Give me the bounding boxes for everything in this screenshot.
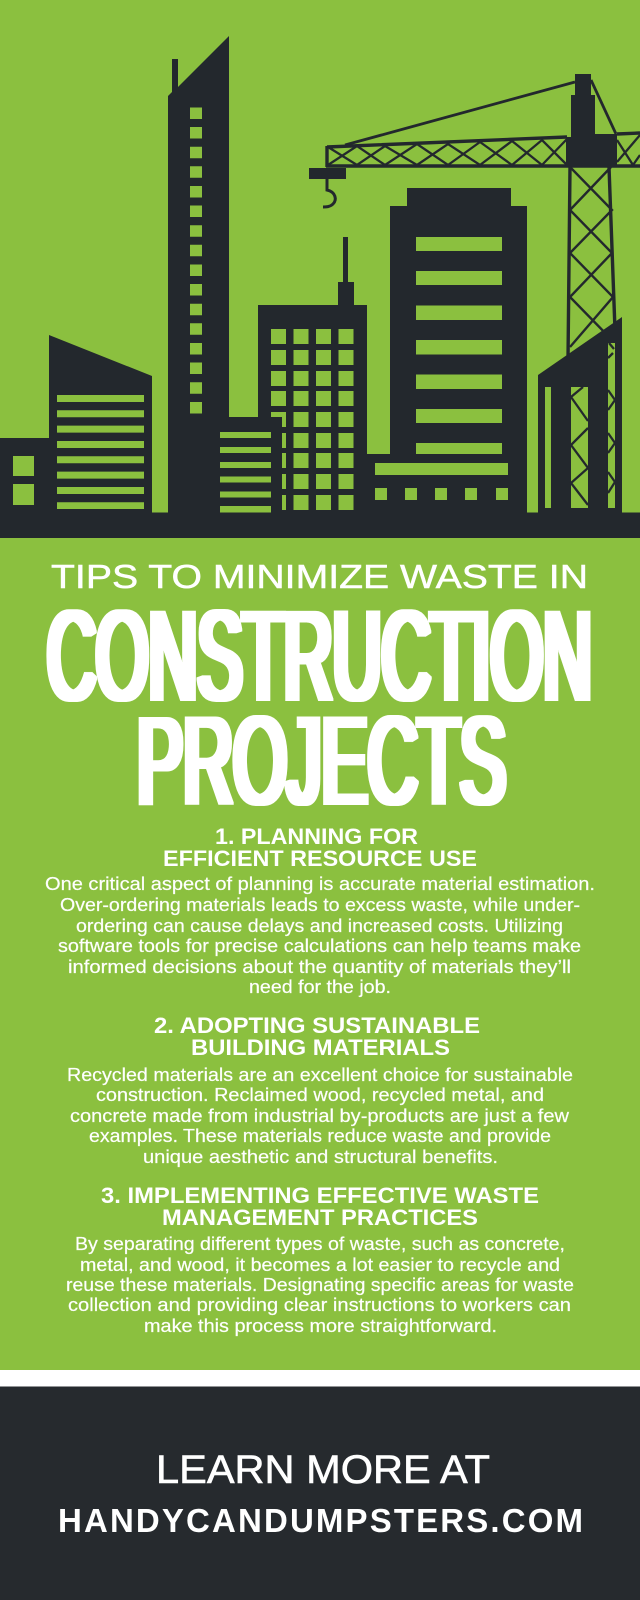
heading 1: EFFICIENT RESOURCE USE	[163, 846, 477, 871]
section 2: sustainable materials	[67, 1013, 573, 1167]
footer: website: HANDYCANDUMPSTERS.COM	[58, 1502, 583, 1539]
heading 3: MANAGEMENT PRACTICES	[162, 1205, 478, 1230]
body text 2	[67, 1064, 573, 1167]
body text 1: One critical aspect of planning is accurate material estimation.	[45, 873, 595, 894]
heading 2	[154, 1013, 480, 1060]
footer panel	[0, 1386, 640, 1600]
illustration: city skyline with crane	[0, 36, 640, 538]
building: grid windows tower	[258, 237, 367, 515]
body text 2: unique aesthetic and structural benefits.	[143, 1146, 498, 1167]
body text 3: reuse these materials. Designating specific areas for waste	[66, 1274, 574, 1295]
building: large central block with bars	[367, 188, 527, 515]
icon: crane hook	[323, 179, 335, 207]
body text 1: informed decisions about the quantity of materials they’ll	[68, 956, 571, 977]
heading 3: 3. IMPLEMENTING EFFECTIVE WASTE	[101, 1183, 539, 1208]
body text 2: examples. These materials reduce waste and provide	[89, 1125, 551, 1146]
body text 1: Over-ordering materials leads to excess waste, while under-	[60, 894, 580, 915]
white divider band	[0, 1370, 640, 1386]
body text 1: ordering can cause delays and increased costs. Utilizing	[76, 915, 563, 936]
title: kicker line: TIPS TO MINIMIZE WASTE IN	[51, 559, 588, 596]
building: tall tower with antenna	[168, 36, 229, 515]
section 3: waste management	[66, 1183, 574, 1336]
body text 2: construction. Reclaimed wood, recycled metal, and	[96, 1084, 544, 1105]
footer: learn more: LEARN MORE AT	[156, 1448, 490, 1492]
body text 1	[45, 873, 595, 997]
building: slanted roof with stripes	[49, 335, 152, 515]
building: left low block	[0, 438, 49, 515]
body text 3: By separating different types of waste, such as concrete,	[75, 1233, 565, 1254]
body text 1: software tools for precise calculations can help teams make	[58, 935, 581, 956]
building: front slanted block with lattice openings	[538, 317, 622, 515]
heading 2: 2. ADOPTING SUSTAINABLE	[154, 1013, 480, 1038]
body text 1: need for the job.	[249, 976, 391, 997]
body text 3	[66, 1233, 574, 1336]
heading 3	[101, 1183, 539, 1230]
body text 2: Recycled materials are an excellent choice for sustainable	[67, 1064, 573, 1085]
crane	[309, 74, 640, 360]
heading 1: 1. PLANNING FOR	[215, 824, 418, 849]
ground strip	[0, 512, 640, 538]
section 1: planning	[45, 824, 595, 997]
body text 3: make this process more straightforward.	[144, 1315, 497, 1336]
body text 3: collection and providing clear instructions to workers can	[68, 1294, 571, 1315]
building: low striped block	[215, 417, 282, 515]
heading 1	[163, 824, 477, 871]
title block	[47, 559, 592, 831]
body text 3: metal, and wood, it becomes a lot easier to recycle and	[80, 1254, 560, 1275]
body text 2: concrete made from industrial by-products are just a few	[70, 1105, 570, 1126]
heading 2: BUILDING MATERIALS	[191, 1035, 450, 1060]
